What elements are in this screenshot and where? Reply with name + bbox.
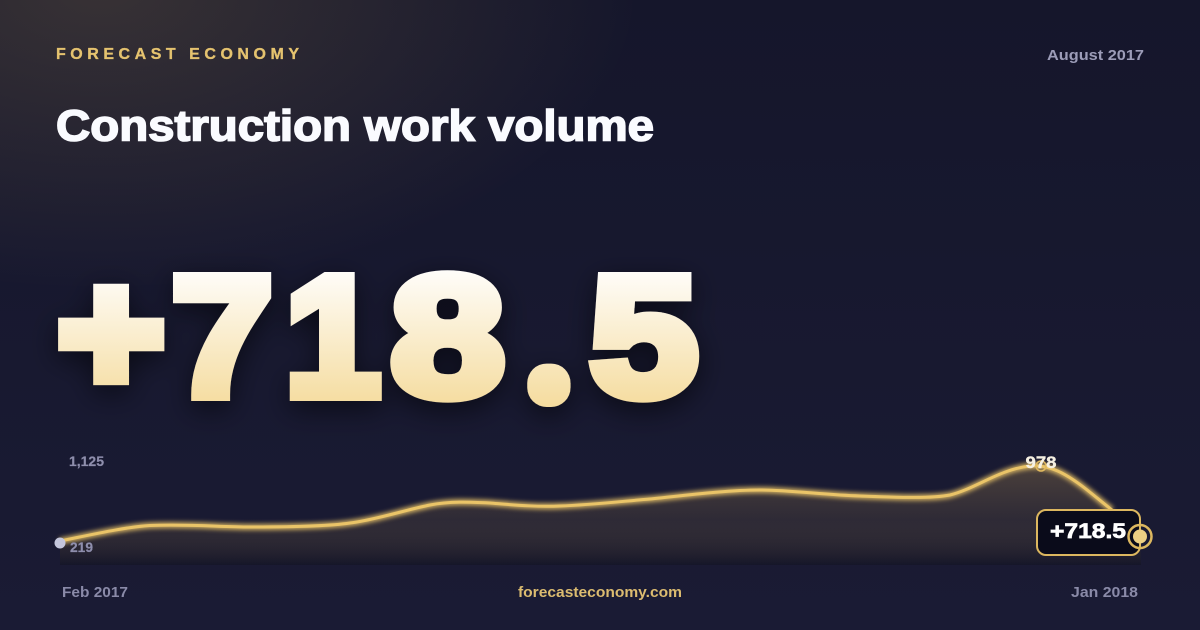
website: forecasteconomy.com [518,584,682,601]
hero value: 5 [590,241,698,431]
end marker [1128,525,1152,548]
hero value: 8 [391,241,504,431]
date label: August 2017 [1047,47,1144,64]
hero value: . [545,362,553,395]
start date: Feb 2017 [62,584,128,601]
line [60,466,1112,541]
peak marker [1036,461,1046,471]
brand label: FORECAST ECONOMY [56,46,299,63]
axis min: 219 [70,540,93,555]
value badge [1037,510,1140,555]
area fill [60,466,1141,565]
sparkline chart [54,453,1152,565]
value badge: +718.5 [1050,520,1126,543]
line glow [60,466,1112,541]
axis max: 1,125 [69,454,104,469]
hero value [58,238,698,432]
hero value: 7 [172,242,273,432]
start point [54,538,66,548]
end date: Jan 2018 [1071,584,1138,601]
hero value: 1 [285,242,380,432]
title: Construction work volume [56,102,654,150]
peak value: 978 [1026,453,1056,472]
hero value: + [58,238,164,428]
